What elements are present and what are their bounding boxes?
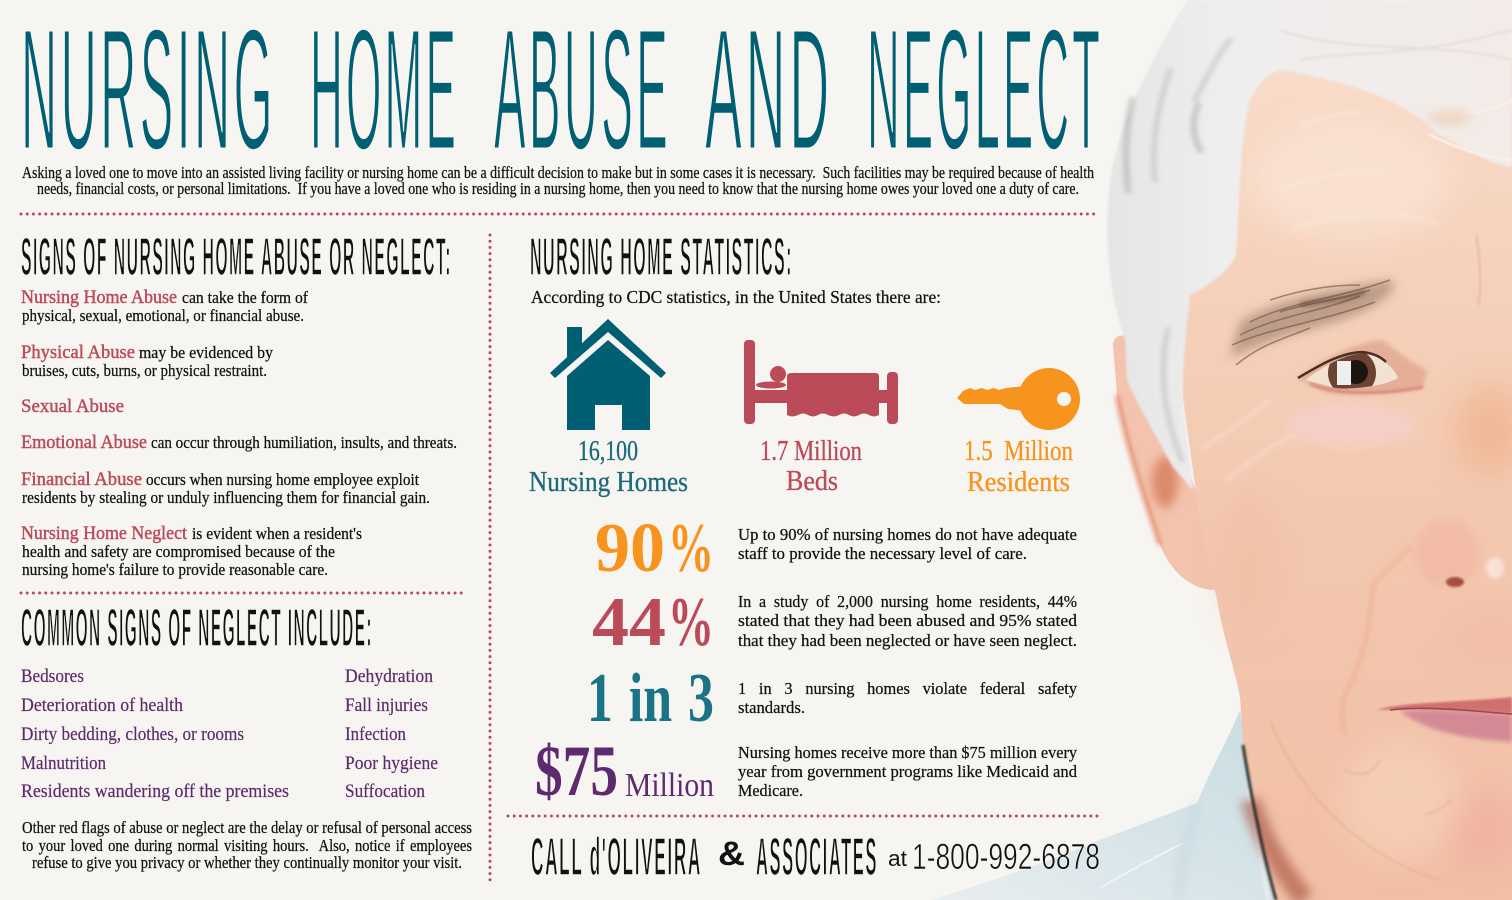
neglect list: Residents wandering off the premises	[21, 782, 289, 802]
text: NURSING HOME STATISTICS:	[530, 227, 793, 287]
neglect list: Bedsores	[21, 667, 84, 687]
call to action: at	[888, 846, 907, 871]
neglect list: Malnutrition	[21, 754, 106, 774]
signs text block: can take the form of	[182, 288, 308, 307]
signs text block: Financial Abuse	[21, 470, 142, 490]
stat: residents	[964, 435, 1073, 498]
call to action: CALL d'OLIVEIRA	[531, 827, 702, 887]
text: 44% explanation: stated that they had been abused and 95% stated	[738, 611, 1078, 630]
eye	[1297, 340, 1427, 397]
neglect list: Infection	[345, 725, 406, 745]
stat: $75 million: $75	[535, 731, 618, 811]
text: 1 in 3 explanation: standards.	[738, 698, 805, 717]
signs text block	[21, 288, 457, 579]
stat: nursing homes: 16,100	[578, 435, 638, 467]
ear	[1113, 335, 1215, 590]
stat: beds: 1.7 Million	[760, 435, 862, 467]
red flags paragraph: Other red flags of abuse or neglect are the delay or refusal of personal access	[22, 818, 472, 837]
text: 1 in 3 explanation: 1 in 3 nursing homes violate federal safety	[738, 679, 1077, 698]
stat: $75 million	[535, 731, 714, 811]
signs text block: occurs when nursing home employee exploit	[146, 470, 419, 489]
neglect list: Fall injuries	[345, 696, 428, 716]
signs text block: is evident when a resident's	[192, 524, 362, 543]
text: 90% explanation: staff to provide the necessary level of care.	[738, 544, 1027, 563]
stat: 90%: %	[668, 510, 714, 587]
stat: residents: Residents	[967, 466, 1070, 498]
stat: 44%	[592, 584, 714, 661]
stat: 90%: 90	[595, 510, 665, 587]
intro text	[22, 163, 1094, 198]
shirt	[930, 710, 1278, 900]
text: SIGNS OF NURSING HOME ABUSE OR NEGLECT:	[21, 227, 452, 287]
hair	[1107, 0, 1512, 490]
call to action: ASSOCIATES	[756, 827, 878, 887]
statistics intro: According to CDC statistics, in the United States there are:	[531, 287, 941, 307]
hair streaks	[1126, 30, 1512, 460]
neglect list: Dirty bedding, clothes, or rooms	[21, 725, 244, 745]
photo: older man's face	[930, 0, 1512, 900]
signs text block: nursing home's failure to provide reasonable care.	[22, 560, 328, 579]
stat: 1 in 3: 1 in 3	[587, 660, 714, 737]
stat: 44%: %	[668, 584, 714, 661]
stat: nursing homes: Nursing Homes	[529, 466, 688, 498]
signs text block: may be evidenced by	[139, 343, 273, 362]
signs text block: Emotional Abuse	[21, 433, 147, 453]
neglect list: Deterioration of health	[21, 696, 183, 716]
face shading	[1200, 112, 1512, 900]
signs text block: bruises, cuts, burns, or physical restraint.	[22, 361, 267, 380]
icon: house	[550, 319, 666, 430]
red flags paragraph	[22, 818, 472, 872]
stat: residents: 1.5 Million	[964, 435, 1073, 467]
signs text block: Sexual Abuse	[21, 397, 124, 417]
call to action: &	[718, 835, 745, 873]
call to action: 1-800-992-6878	[912, 836, 1100, 877]
stat: nursing homes	[529, 435, 688, 498]
signs text block: Nursing Home Neglect	[21, 524, 188, 544]
neglect list: Dehydration	[345, 667, 433, 687]
intro text: Asking a loved one to move into an assisted living facility or nursing home can be a difficult decision to make but in some cases it is necessary. Such facilities may be required because of health	[22, 163, 1094, 182]
text: 44% explanation	[738, 592, 1078, 650]
signs text block: physical, sexual, emotional, or financial abuse.	[22, 306, 304, 325]
text: 90% explanation: Up to 90% of nursing homes do not have adequate	[738, 525, 1077, 544]
signs text block: residents by stealing or unduly influencing them for financial gain.	[22, 488, 430, 507]
icon: key	[957, 368, 1080, 430]
stat: beds	[760, 435, 862, 497]
neglect list: Suffocation	[345, 782, 425, 802]
signs text block: Physical Abuse	[21, 343, 135, 363]
red flags paragraph: to your loved one during normal visiting hours. Also, notice if employees	[22, 836, 472, 855]
stat: 90%	[595, 510, 714, 587]
signs text block: health and safety are compromised because of the	[22, 542, 335, 561]
face skin	[1175, 60, 1512, 900]
stat: 44%: 44	[592, 584, 666, 661]
stat: $75 million: Million	[625, 767, 714, 804]
text: 90% explanation	[738, 525, 1077, 563]
text: 44% explanation: that they had been neglected or have seen neglect.	[738, 631, 1077, 650]
signs text block: Nursing Home Abuse	[21, 288, 177, 308]
red flags paragraph: refuse to give you privacy or whether they continually monitor your visit.	[32, 853, 462, 872]
eyebrow	[1230, 280, 1394, 365]
neglect list	[21, 667, 438, 802]
text: $75 million explanation: year from government programs like Medicaid and	[738, 762, 1077, 781]
text: 44% explanation: In a study of 2,000 nursing home residents, 44%	[738, 592, 1077, 611]
stat: beds: Beds	[786, 465, 838, 497]
text: COMMON SIGNS OF NEGLECT INCLUDE:	[21, 598, 373, 658]
signs text block: can occur through humiliation, insults, and threats.	[151, 433, 457, 452]
icon: bed	[744, 340, 898, 424]
lips	[1377, 697, 1512, 742]
neglect list: Poor hygiene	[345, 754, 438, 774]
text: $75 million explanation	[738, 743, 1077, 800]
text: $75 million explanation: Medicare.	[738, 781, 803, 800]
text: $75 million explanation: Nursing homes receive more than $75 million every	[738, 743, 1077, 762]
text: 1 in 3 explanation	[738, 679, 1077, 717]
intro text: needs, financial costs, or personal limitations. If you have a loved one who is residing in a nursing home, then you need to know that the nursing home owes your loved one a duty of care.	[37, 179, 1079, 198]
